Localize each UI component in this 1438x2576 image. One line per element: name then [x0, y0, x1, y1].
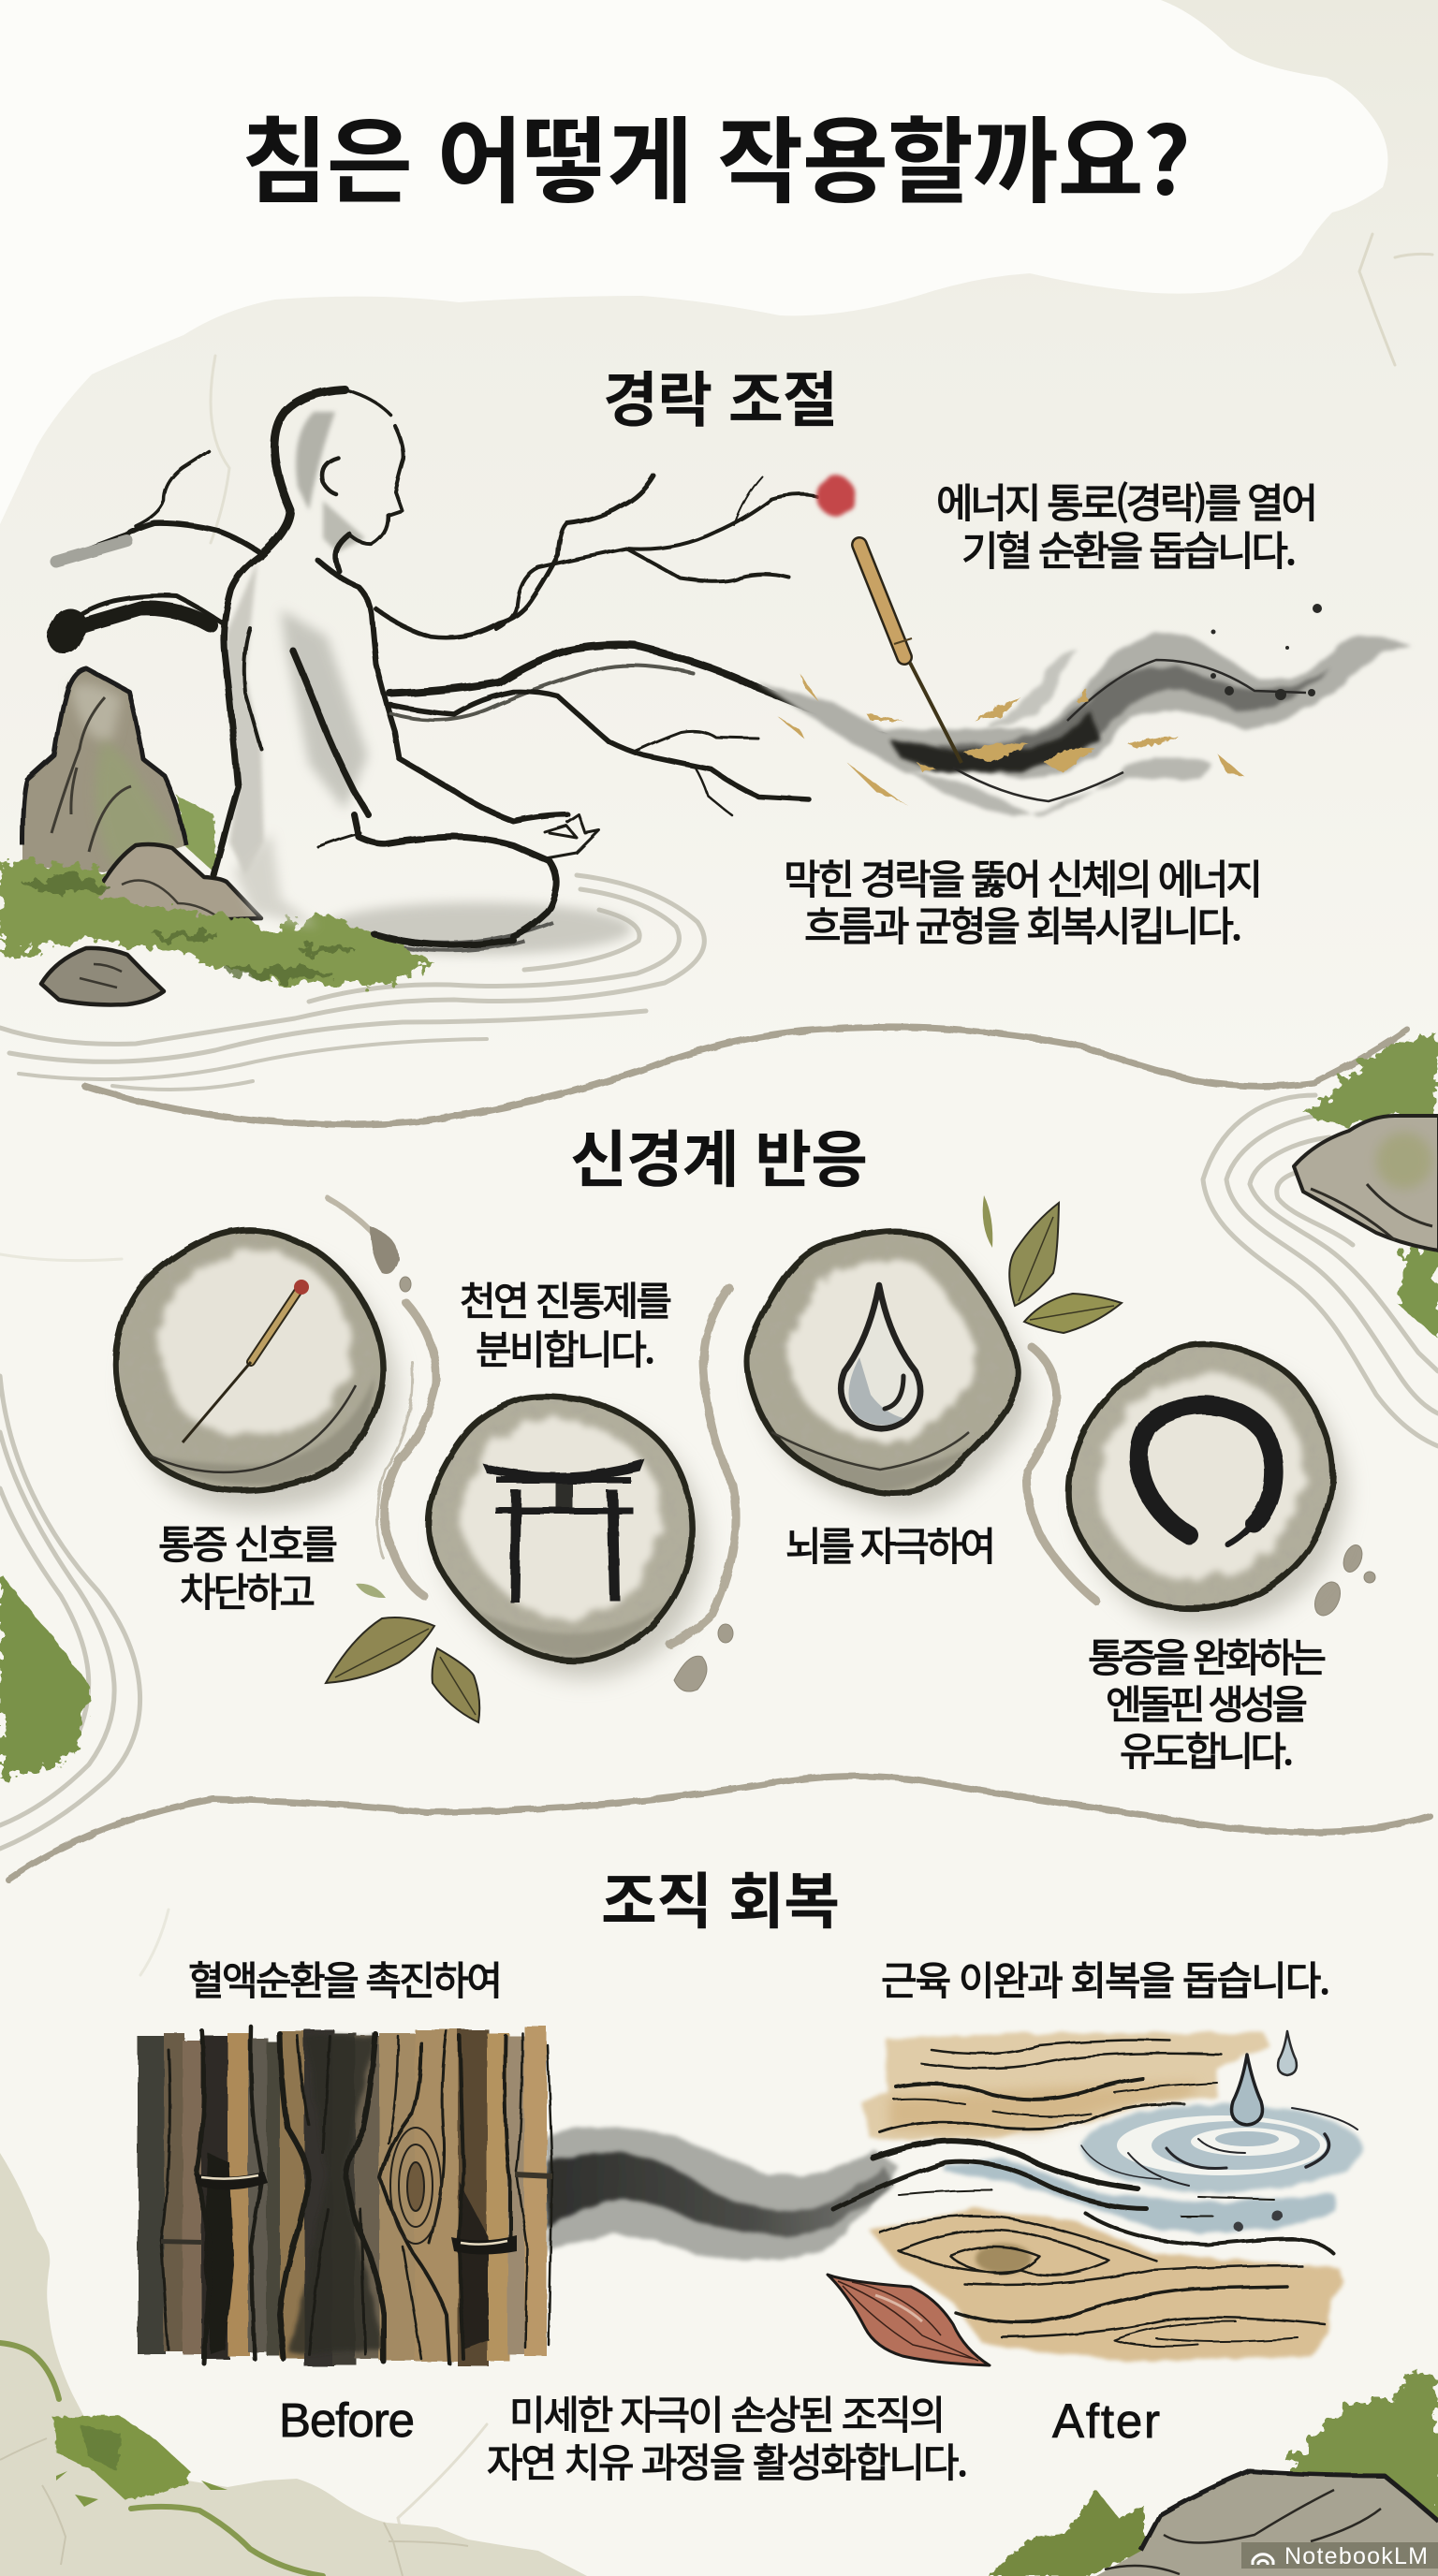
dark swirl blob [370, 1226, 399, 1274]
lower tan wash [870, 2209, 1343, 2362]
ground shadow [323, 902, 632, 955]
acupuncture needle [859, 545, 961, 763]
text: endorphin production: 통증을 완화하는 [1088, 1627, 1327, 1684]
text: natural analgesics: 분비합니다. [476, 1319, 655, 1376]
water stream [945, 2158, 1335, 2234]
moss: grass left of rock [988, 2490, 1144, 2576]
divider one [84, 1027, 1407, 1124]
upper tan wash [861, 2033, 1269, 2139]
meridian branches [56, 451, 961, 815]
bottom left torn paper [0, 2153, 587, 2576]
text: blocks pain signals: 차단하고 [180, 1561, 315, 1618]
stone: enso circle [1069, 1344, 1346, 1627]
grain lines [161, 2027, 552, 2364]
cracks in torn paper [0, 2438, 468, 2576]
text: endorphin production [1088, 1627, 1327, 1778]
moss: bottom right [1283, 2368, 1438, 2527]
text: blocks pain signals: 통증 신호를 [158, 1514, 338, 1571]
stone: torii gate [429, 1397, 706, 1679]
text: micro stimulation: 자연 치유 과정을 활성화합니다. [487, 2432, 968, 2489]
text: natural analgesics [460, 1270, 672, 1376]
icon: drop [841, 1285, 920, 1428]
icon: notebook arcs [1253, 2554, 1273, 2565]
panel: tissue recovery [138, 1852, 1362, 2489]
text: balance restoration: 흐름과 균형을 회복시킵니다. [804, 895, 1242, 953]
gold flecks [777, 674, 1245, 805]
bamboo dark shades [204, 2153, 234, 2354]
text: energy channel [936, 472, 1318, 578]
text: endorphin production: 엔돌핀 생성을 [1106, 1674, 1308, 1731]
text: micro stimulation [487, 2384, 968, 2489]
stream ink lines [833, 2142, 1334, 2254]
heading: tissue recovery: 조직 회복 [601, 1852, 840, 1940]
label: before: Before [279, 2393, 415, 2447]
grain lines [880, 2041, 1325, 2347]
figure washes [281, 609, 368, 810]
text: natural analgesics: 천연 진통제를 [460, 1270, 672, 1327]
moss: right lower [1400, 1245, 1438, 1339]
text: energy channel: 기혈 순환을 돕습니다. [961, 520, 1297, 578]
water drops [1232, 2031, 1297, 2125]
text: stimulates the brain: 뇌를 자극하여 [785, 1515, 996, 1573]
heading: nervous system response: 신경계 반응 [570, 1110, 868, 1200]
text: balance restoration [784, 848, 1263, 953]
ripples around figure [0, 875, 704, 1090]
moss: right upper [1303, 1034, 1438, 1128]
moss: left [0, 1573, 92, 1778]
text: muscle relaxation: 근육 이완과 회복을 돕습니다. [881, 1950, 1330, 2007]
divider two [8, 1777, 1430, 1880]
rock: right upper [1294, 1116, 1438, 1251]
wood grain: before [138, 2027, 552, 2366]
text: micro stimulation: 미세한 자극이 손상된 조직의 [509, 2384, 946, 2441]
water ripple [1081, 2104, 1362, 2192]
heading: meridian regulation: 경락 조절 [603, 353, 838, 439]
swirl strokes [328, 1198, 1096, 1645]
stone: needle [116, 1230, 396, 1511]
leaves: lower left [326, 1584, 479, 1722]
watermark: NotebookLM: NotebookLM [1284, 2543, 1428, 2569]
leaves: upper right [983, 1195, 1122, 1333]
ink drops [1211, 604, 1322, 700]
title: 침은 어떻게 작용할까요? [242, 86, 1191, 222]
text: promotes circulation: 혈액순환을 촉진하여 [188, 1950, 503, 2007]
right ripple lines [1203, 1095, 1438, 1446]
wood grain: after [828, 2031, 1362, 2365]
label: after: After [1052, 2394, 1160, 2448]
small pebbles [400, 1277, 1375, 1691]
figure ink lines [213, 389, 599, 945]
title cloud [0, 0, 1387, 524]
muscle fibre [828, 2275, 990, 2365]
left ripple lines [0, 1376, 140, 1849]
ink stream [547, 2127, 899, 2260]
moss: dark patches [23, 878, 356, 980]
moss: behind rocks [177, 796, 217, 875]
panel: nervous system response [0, 1034, 1438, 1849]
text: energy channel: 에너지 통로(경락)를 열어 [936, 472, 1318, 530]
moss and vine: bottom left [0, 2343, 323, 2576]
ink wash: blocked meridian [758, 545, 1412, 815]
red acupoint [816, 476, 856, 516]
wood knot [390, 2128, 441, 2244]
text: endorphin production: 유도합니다. [1120, 1720, 1294, 1778]
text: balance restoration: 막힌 경락을 뚫어 신체의 에너지 [784, 848, 1263, 906]
moss: left bank [0, 862, 435, 987]
icon: torii [482, 1459, 645, 1603]
rock: bottom right [1096, 2471, 1438, 2576]
icon: enso [1139, 1405, 1274, 1544]
bamboo nodes [161, 2172, 552, 2254]
panel: meridian regulation [0, 353, 1412, 1090]
text: blocks pain signals [158, 1514, 338, 1618]
figure: meditating person [213, 389, 599, 945]
icon: needle [183, 1280, 309, 1442]
rock: lower pebble [41, 948, 164, 1004]
rock: tall [22, 668, 186, 872]
stone: water drop [747, 1232, 1031, 1512]
rock: small front [93, 844, 261, 922]
